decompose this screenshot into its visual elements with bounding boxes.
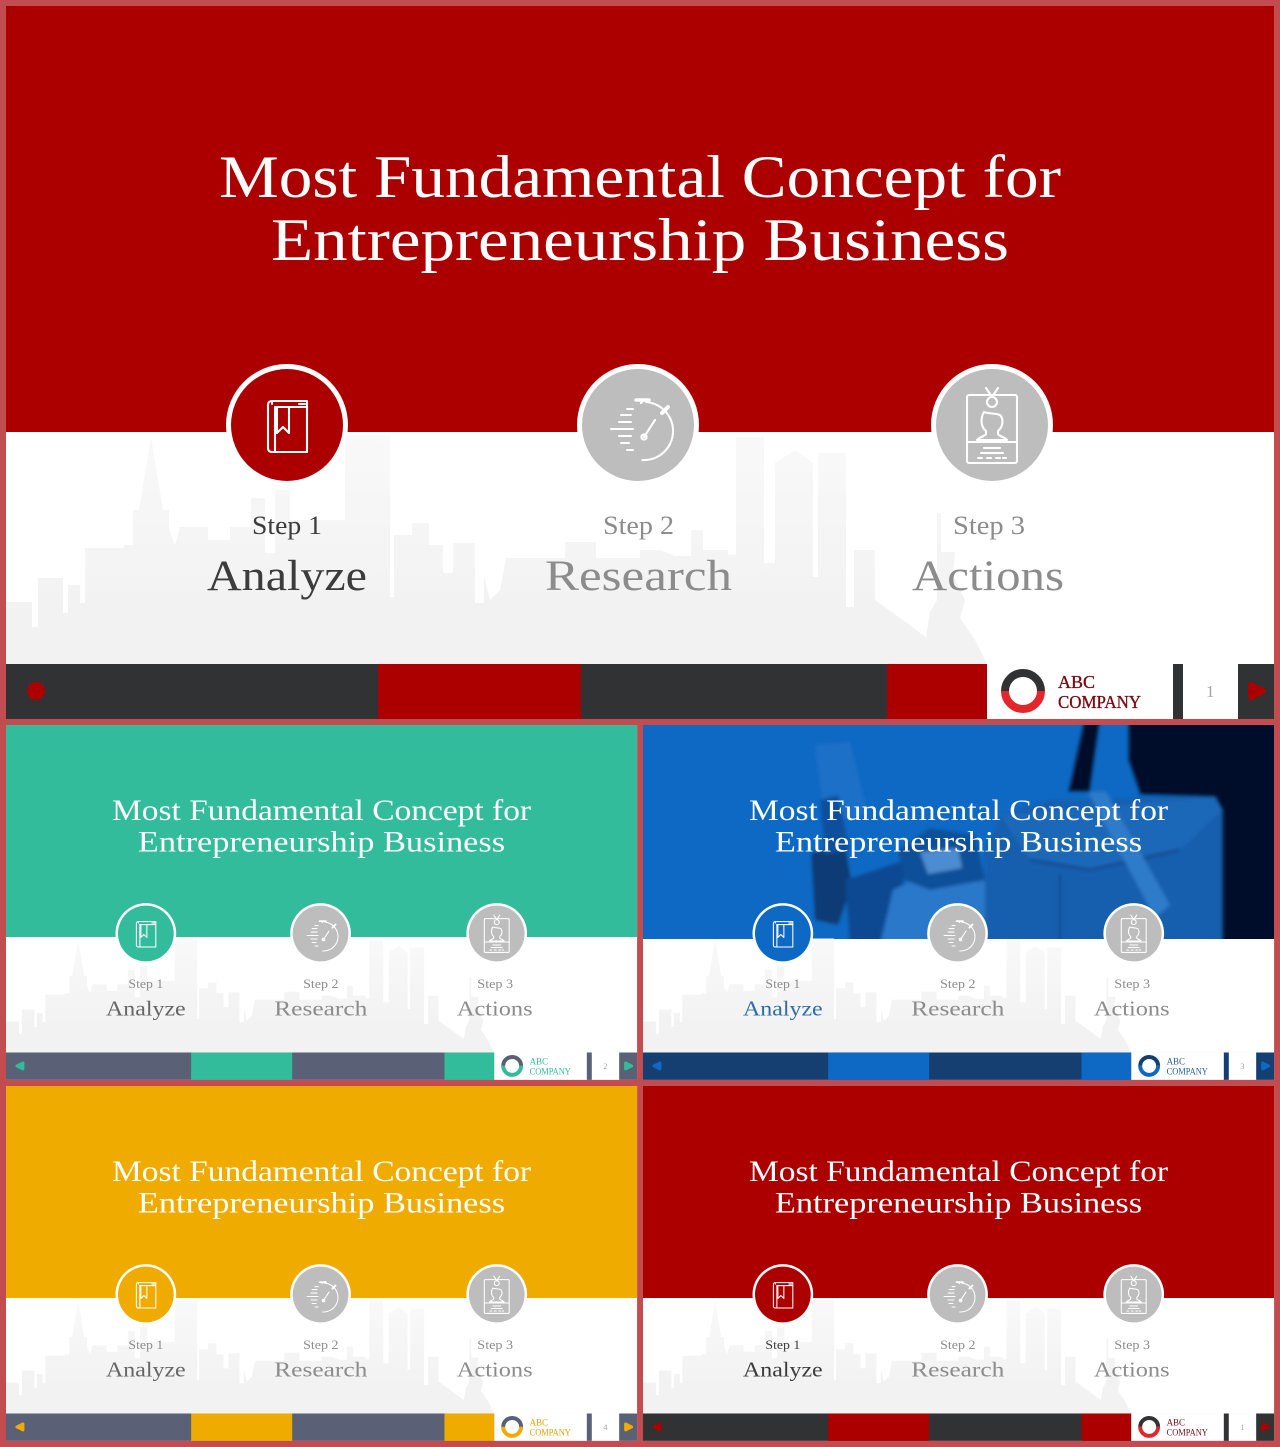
step 2: Step 2 [303, 976, 338, 991]
title: Most Fundamental Concept for [112, 794, 531, 827]
step 1 [106, 903, 186, 1021]
step 3: Actions [457, 1358, 533, 1382]
slide 2: teal slide [6, 725, 637, 1080]
title [112, 1155, 531, 1219]
step 2: Step 2 [303, 1337, 338, 1352]
footer bar: COMPANY [1058, 692, 1141, 712]
step 3 [912, 364, 1064, 600]
footer bar: ABC [530, 1417, 548, 1427]
step 1 [106, 1264, 186, 1382]
step 2 [274, 903, 368, 1021]
city skyline [6, 939, 494, 1052]
title: Entrepreneurship Business [138, 1186, 505, 1219]
slide 4: gold slide [6, 1086, 637, 1441]
footer bar [643, 1052, 1274, 1080]
city skyline [6, 1300, 494, 1413]
footer bar: COMPANY [1167, 1066, 1208, 1076]
footer bar: 2 [603, 1061, 607, 1071]
title: Entrepreneurship Business [775, 1186, 1142, 1219]
step 3 [1094, 903, 1170, 1021]
step 1 [207, 364, 367, 600]
footer bar: COMPANY [530, 1066, 571, 1076]
footer bar: COMPANY [1167, 1427, 1208, 1437]
step 2: Research [274, 1358, 368, 1382]
city skyline [643, 939, 1131, 1052]
footer bar: 3 [1240, 1061, 1244, 1071]
step 1: Step 1 [128, 1337, 163, 1352]
footer bar: ABC [530, 1056, 548, 1066]
step 1: Analyze [743, 997, 823, 1021]
photo: laptop and briefcase in blue duotone [643, 725, 1274, 939]
step 2 [274, 1264, 368, 1382]
step 3: Actions [1094, 1358, 1170, 1382]
step 2: Research [911, 997, 1005, 1021]
step 3: Actions [912, 553, 1064, 600]
step 3: Actions [457, 997, 533, 1021]
step 2 [911, 903, 1005, 1021]
step 2: Research [911, 1358, 1005, 1382]
step 1: Step 1 [252, 511, 322, 540]
title: Most Fundamental Concept for [749, 1155, 1168, 1188]
step 2: Step 2 [940, 976, 975, 991]
footer bar: 1 [1240, 1422, 1244, 1432]
title: Entrepreneurship Business [138, 825, 505, 858]
step 1: Step 1 [128, 976, 163, 991]
step 2 [911, 1264, 1005, 1382]
footer bar: ABC [1167, 1417, 1185, 1427]
footer bar: ABC [1058, 672, 1095, 692]
title [749, 794, 1168, 858]
step 1: Analyze [106, 1358, 186, 1382]
step 2: Step 2 [940, 1337, 975, 1352]
step 1 [743, 903, 823, 1021]
step 2: Research [545, 553, 732, 600]
title [749, 1155, 1168, 1219]
title: Most Fundamental Concept for [112, 1155, 531, 1188]
step 2 [545, 364, 732, 600]
step 2: Step 2 [603, 511, 674, 540]
step 1: Analyze [106, 997, 186, 1021]
slide 1: large red slide [6, 6, 1274, 719]
step 1: Analyze [743, 1358, 823, 1382]
step 3 [457, 1264, 533, 1382]
title: Entrepreneurship Business [775, 825, 1142, 858]
footer bar [6, 1052, 637, 1080]
step 3: Actions [1094, 997, 1170, 1021]
footer bar [6, 1413, 637, 1441]
step 3: Step 3 [953, 511, 1025, 540]
step 3: Step 3 [1114, 1337, 1150, 1352]
title [112, 794, 531, 858]
city skyline [6, 435, 987, 664]
footer bar [643, 1413, 1274, 1441]
footer bar: ABC [1167, 1056, 1185, 1066]
slide 3: blue photo slide [630, 715, 1280, 1080]
step 3 [1094, 1264, 1170, 1382]
title: Most Fundamental Concept for [219, 144, 1061, 210]
step 3: Step 3 [477, 976, 513, 991]
footer bar: COMPANY [530, 1427, 571, 1437]
city skyline [643, 1300, 1131, 1413]
slide 5: small red slide [643, 1086, 1274, 1441]
title: Entrepreneurship Business [271, 207, 1009, 273]
step 1: Step 1 [765, 1337, 800, 1352]
footer bar [6, 664, 1274, 719]
step 3: Step 3 [477, 1337, 513, 1352]
step 2: Research [274, 997, 368, 1021]
title [219, 144, 1061, 273]
footer bar: 4 [603, 1422, 608, 1432]
step 3 [457, 903, 533, 1021]
title: Most Fundamental Concept for [749, 794, 1168, 827]
step 3: Step 3 [1114, 976, 1150, 991]
footer bar: 1 [1206, 682, 1214, 701]
step 1: Step 1 [765, 976, 800, 991]
step 1: Analyze [207, 553, 367, 600]
step 1 [743, 1264, 823, 1382]
